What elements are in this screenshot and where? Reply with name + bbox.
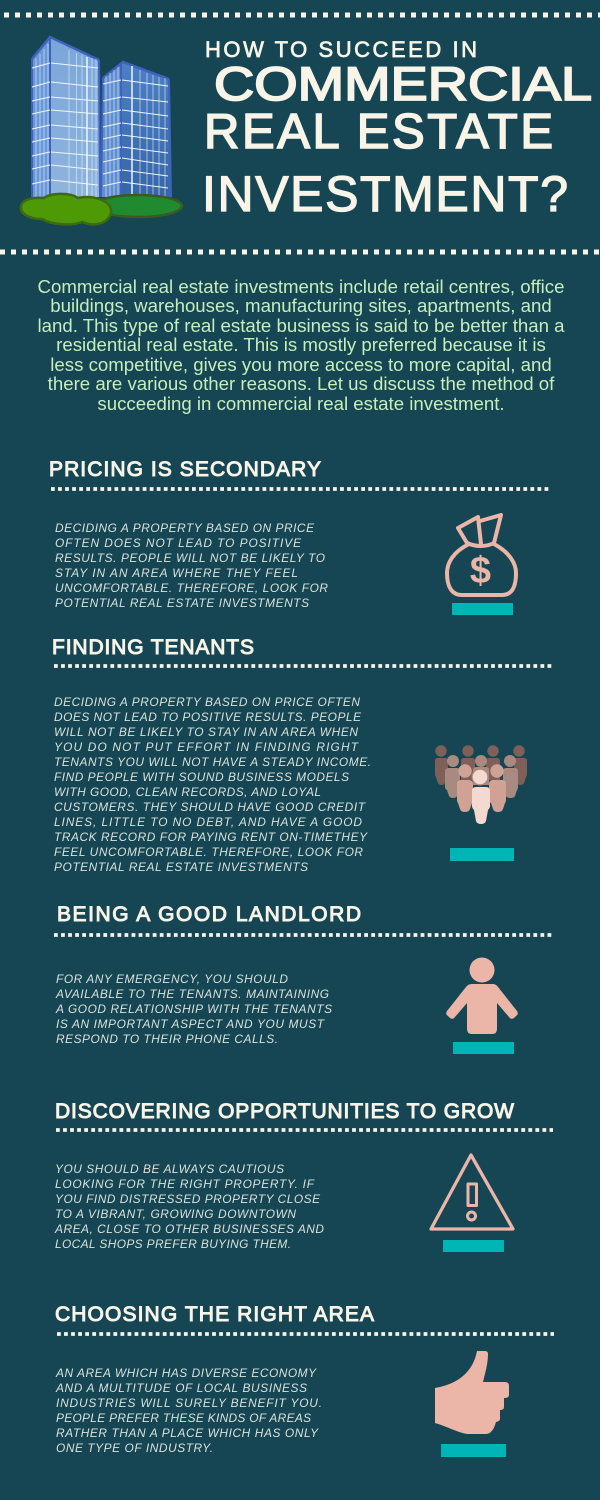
text block: tenants [54, 695, 371, 874]
heading: being a good landlord: BEING A GOOD LANDLORD [57, 903, 361, 926]
intro paragraph: there are various other reasons. Let us discuss the method of [48, 373, 555, 394]
teal bar [453, 1042, 514, 1054]
icon: thumbs up [435, 1351, 509, 1434]
text block: pricing: POTENTIAL REAL ESTATE INVESTMENTS [55, 596, 309, 610]
text block: opportunities: YOU FIND DISTRESSED PROPERTY CLOSE [55, 1192, 321, 1206]
text block: opportunities [54, 1162, 324, 1251]
icon: person [446, 958, 518, 1034]
teal bar [450, 848, 514, 861]
text block: opportunities: AREA, CLOSE TO OTHER BUSINESSES AND [54, 1222, 324, 1236]
text block: opportunities: LOCAL SHOPS PREFER BUYING THEM. [55, 1237, 291, 1251]
text block: area: AN AREA WHICH HAS DIVERSE ECONOMY [55, 1366, 317, 1380]
text block: landlord [55, 972, 332, 1046]
panel: being a good landlord [54, 903, 552, 1054]
text block: tenants: LINES, LITTLE TO NO DEBT, AND HAVE A GOOD [54, 815, 362, 829]
title: HOW TO SUCCEED IN [205, 37, 477, 62]
text block: landlord: IS AN IMPORTANT ASPECT AND YOU MUST [56, 1017, 325, 1031]
text block: tenants: TENANTS YOU WILL NOT HAVE A STEADY INCOME. [54, 755, 371, 769]
icon: group of people [435, 745, 527, 824]
heading: pricing is secondary: PRICING IS SECONDARY [49, 458, 321, 481]
intro paragraph: Commercial real estate investments include retail centres, office [38, 276, 564, 297]
teal bar [443, 1240, 504, 1252]
text block: tenants: WILL NOT BE LIKELY TO STAY IN AN AREA WHEN [54, 725, 358, 739]
text block: pricing: STAY IN AN AREA WHERE THEY FEEL [55, 566, 298, 580]
text block: pricing [55, 521, 328, 610]
panel: choosing the right area [55, 1303, 554, 1457]
text block: landlord: RESPOND TO THEIR PHONE CALLS. [56, 1032, 278, 1046]
icon: warning triangle [431, 1155, 513, 1229]
text block: area: INDUSTRIES WILL SURELY BENEFIT YOU. [56, 1396, 322, 1410]
text block: area: AND A MULTITUDE OF LOCAL BUSINESS [55, 1381, 307, 1395]
text block: landlord: AVAILABLE TO THE TENANTS. MAINTAINING [55, 987, 329, 1001]
text block: area [55, 1366, 322, 1455]
text block: landlord: A GOOD RELATIONSHIP WITH THE TENANTS [55, 1002, 332, 1016]
text block: tenants: FEEL UNCOMFORTABLE. THEREFORE, LOOK FOR [54, 845, 363, 859]
panel: finding tenants [52, 636, 552, 874]
text block: pricing: OFTEN DOES NOT LEAD TO POSITIVE [55, 536, 302, 550]
title: COMMERCIAL [214, 57, 592, 110]
text block: opportunities: YOU SHOULD BE ALWAYS CAUTIOUS [55, 1162, 284, 1176]
text block: pricing: UNCOMFORTABLE. THEREFORE, LOOK FOR [55, 581, 328, 595]
intro paragraph: land. This type of real estate business is said to be better than a [37, 315, 565, 336]
icon: money bag [447, 515, 516, 595]
intro paragraph: residential real estate. This is mostly preferred because it is [56, 334, 546, 355]
title: REAL ESTATE [204, 105, 553, 159]
title [202, 37, 592, 222]
panel: discovering opportunities to grow [54, 1100, 553, 1252]
title: INVESTMENT? [202, 166, 568, 222]
text block: pricing: DECIDING A PROPERTY BASED ON PRICE [55, 521, 315, 535]
text block: opportunities: TO A VIBRANT, GROWING DOWNTOWN [55, 1207, 296, 1221]
text block: tenants: DOES NOT LEAD TO POSITIVE RESULTS. PEOPLE [54, 710, 362, 724]
heading: discovering opportunities: DISCOVERING OPPORTUNITIES TO GROW [55, 1100, 514, 1123]
text block: tenants: YOU DO NOT PUT EFFORT IN FINDING RIGHT [54, 740, 359, 754]
text block: tenants: TRACK RECORD FOR PAYING RENT ON-TIMETHEY [54, 830, 368, 844]
intro paragraph: less competitive, gives you more access to more capital, and [50, 354, 552, 375]
intro paragraph: buildings, warehouses, manufacturing sites, apartments, and [50, 295, 552, 316]
icon: office towers with bushes [21, 37, 182, 224]
text block: opportunities: LOOKING FOR THE RIGHT PROPERTY. IF [55, 1177, 315, 1191]
heading: choosing the right area: CHOOSING THE RIGHT AREA [55, 1303, 374, 1326]
text block: tenants: DECIDING A PROPERTY BASED ON PRICE OFTEN [54, 695, 360, 709]
text block: tenants: POTENTIAL REAL ESTATE INVESTMENTS [54, 860, 308, 874]
text block: tenants: FIND PEOPLE WITH SOUND BUSINESS MODELS [54, 770, 349, 784]
intro paragraph [37, 276, 565, 414]
icon: money bag: $ [470, 550, 491, 592]
text block: landlord: FOR ANY EMERGENCY, YOU SHOULD [56, 972, 288, 986]
teal bar [441, 1444, 506, 1457]
heading: finding tenants: FINDING TENANTS [52, 636, 254, 659]
text block: area: ONE TYPE OF INDUSTRY. [56, 1441, 213, 1455]
text block: tenants: WITH GOOD, CLEAN RECORDS, AND LOYAL [54, 785, 321, 799]
text block: area: RATHER THAN A PLACE WHICH HAS ONLY [56, 1426, 319, 1440]
text block: area: PEOPLE PREFER THESE KINDS OF AREAS [56, 1411, 311, 1425]
intro paragraph: succeeding in commercial real estate investment. [97, 393, 505, 414]
panel: pricing is secondary [49, 458, 549, 615]
teal bar [452, 603, 513, 615]
text block: tenants: CUSTOMERS. THEY SHOULD HAVE GOOD CREDIT [54, 800, 366, 814]
text block: pricing: RESULTS. PEOPLE WILL NOT BE LIKELY TO [55, 551, 325, 565]
